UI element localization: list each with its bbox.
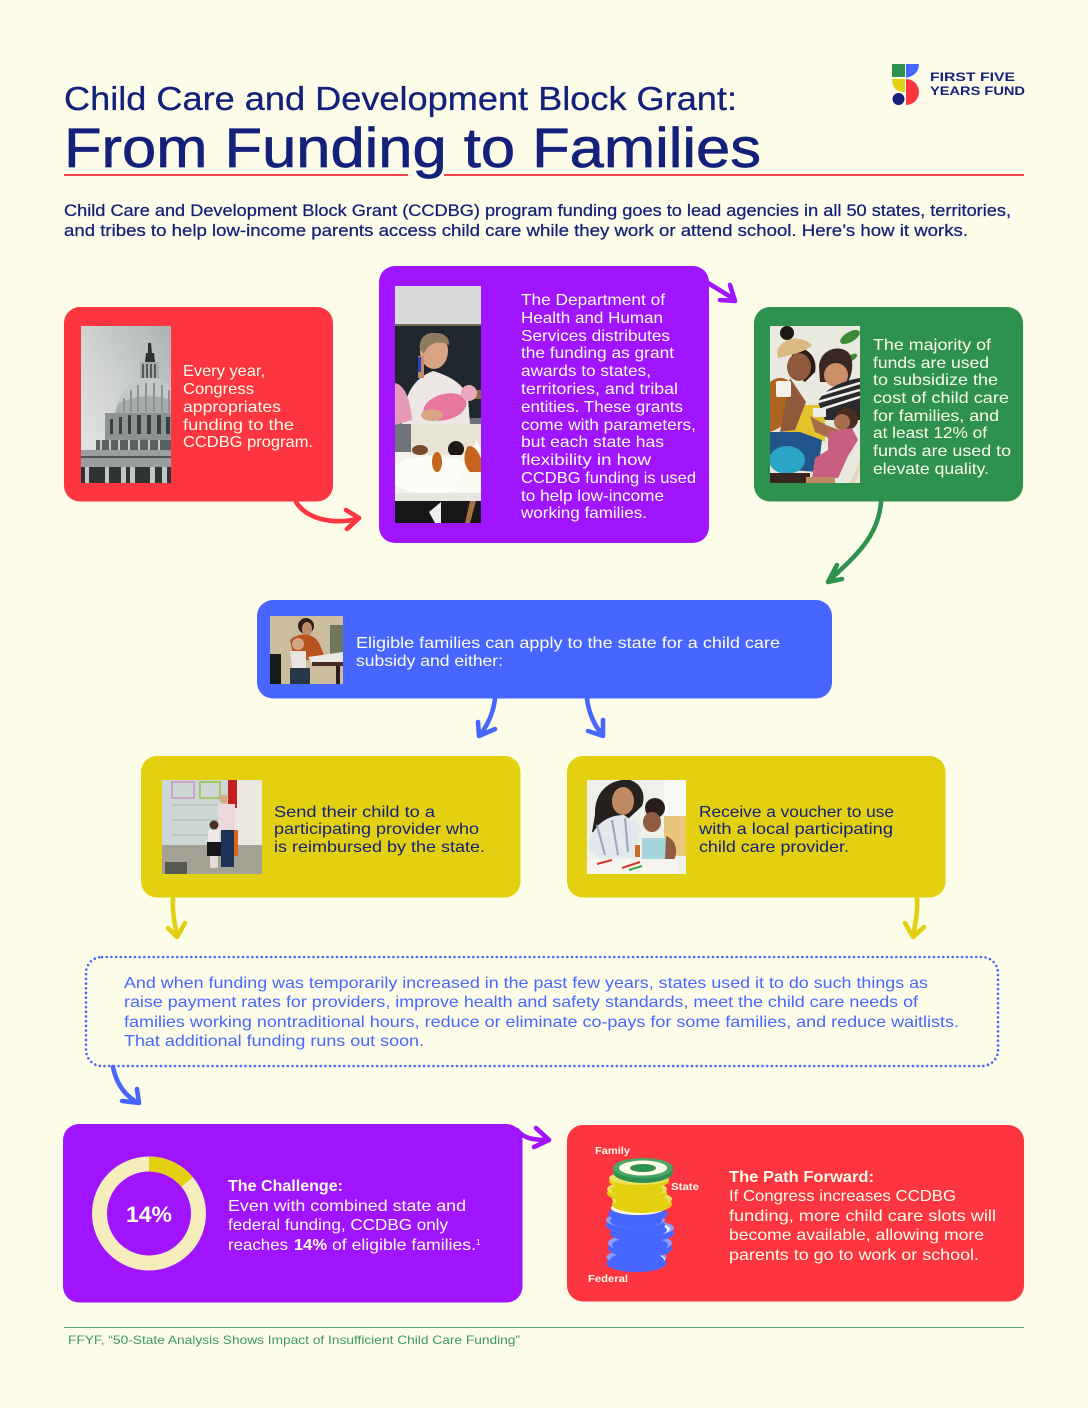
text: path forward: parents to go to work or school. [729,1247,979,1264]
donut chart: 14% [100,1164,198,1263]
text: grants distribution: to help low-income [521,488,664,505]
text: challenge: federal funding, CCDBG only [228,1217,448,1234]
panel: subsidies [754,307,1023,502]
icon: stack of coins with labels: Federal [588,1273,628,1285]
arrow: blue to right yellow [587,699,603,736]
text: send child: Send their child to a [274,804,435,821]
text: Congress appropriates: appropriates [183,399,281,416]
text: majority of funds: for families, and [873,408,999,425]
logo: First Five Years Fund: YEARS FUND [930,84,1025,98]
arrow: right yellow to note [905,898,924,937]
text: grants distribution: The Department of [521,292,666,309]
text: voucher [698,804,894,856]
icon: stack of coins with labels: Family [595,1145,630,1157]
text: majority of funds: elevate quality. [873,461,989,478]
text: majority of funds: cost of child care [873,390,1009,407]
text: grants distribution: awards to states, [521,363,651,380]
text: Congress appropriates [183,363,313,451]
callout: temporary funding note: families working nontraditional hours, reduce or eliminate co-pays for some families, and reduce waitlists. [124,1014,959,1031]
donut chart: 14%: 14% [126,1202,172,1227]
text: path forward: funding, more child care slots will [729,1208,996,1225]
callout: temporary funding note: raise payment rates for providers, improve health and safety standards, meet the child care needs of [124,994,919,1011]
text: grants distribution: the funding as grant [521,345,675,362]
text: majority of funds: to subsidize the [873,372,998,389]
arrow: green to blue [828,502,881,582]
icon: stack of coins with labels: State [671,1181,699,1193]
arrow: red to purple [296,502,359,529]
text: majority of funds [873,337,1011,478]
text: voucher: with a local participating [698,821,893,838]
panel: send child to provider [141,756,520,898]
text: majority of funds: funds are used [873,355,989,372]
text: grants distribution: working families. [520,505,647,522]
panel: the challenge [63,1124,522,1302]
panel: Health and Human Services [379,266,709,543]
footnote: FFYF, “50-State Analysis Shows Impact of Insufficient Child Care Funding” [68,1333,520,1347]
text: eligible families apply [356,635,780,670]
panel: voucher [567,756,946,898]
text: send child [274,804,485,856]
photo: adult and child walking in hallway [162,780,262,874]
text: grants distribution: territories, and tribal [521,381,678,398]
icon: stack of coins with labels [588,1145,699,1285]
text: path forward: The Path Forward: [729,1169,874,1186]
text: grants distribution: CCDBG funding is used [521,470,696,487]
text: challenge: Even with combined state and [228,1198,466,1215]
photo: US Capitol [81,326,171,483]
logo: First Five Years Fund: FIRST FIVE [930,70,1015,84]
text: majority of funds: The majority of [873,337,992,354]
text: challenge: reaches [228,1237,288,1254]
photo: two women feeding a baby [770,326,860,483]
text: voucher: Receive a voucher to use [699,804,894,821]
text: grants distribution: come with parameters, [521,417,696,434]
text: send child: participating provider who [274,821,479,838]
text: Congress appropriates: funding to the [183,417,294,434]
panel: eligible families [257,600,832,698]
intro text [64,202,1011,240]
text: grants distribution: Services distributes [521,328,670,345]
text: grants distribution: flexibility in how [521,452,652,469]
intro text: Child Care and Development Block Grant (CCDBG) program funding goes to lead agencies in all 50 states, territories, [64,202,1011,220]
photo: woman and child drawing [587,780,686,874]
text: Congress appropriates: Every year, [183,363,265,380]
arrow: blue to left yellow [478,699,495,736]
panel: the path forward [567,1125,1024,1302]
logo: First Five Years Fund [892,64,1025,105]
text: majority of funds: at least 12% of [873,425,988,442]
callout: temporary funding note: And when funding was temporarily increased in the past few years, states used it to do such things as [124,975,928,992]
text: send child: is reimbursed by the state. [274,839,485,856]
intro text: and tribes to help low-income parents access child care while they work or attend school. Here’s how it works. [64,222,968,240]
photo: man on phone holding baby, cat on table [395,286,481,523]
title: From Funding to Families [64,116,761,179]
panel: Congress [64,307,333,502]
callout: temporary funding note: That additional funding runs out soon. [124,1033,424,1050]
text: challenge: 1 [476,1238,481,1247]
arrow: challenge to path forward [517,1128,549,1147]
text: grants distribution: entities. These grants [521,399,683,416]
text: challenge: 14% [294,1237,327,1254]
photo: mother on phone with child [270,616,343,684]
arrow: purple to green [708,283,735,301]
text: challenge [228,1178,481,1254]
arrow: note to challenge [113,1067,139,1103]
text: path forward [729,1169,996,1264]
text: grants distribution: Health and Human [521,310,663,327]
text: path forward: If Congress increases CCDBG [729,1188,956,1205]
text: challenge: The Challenge: [228,1178,343,1195]
title: Child Care and Development Block Grant: [64,80,737,117]
text: voucher: child care provider. [699,839,849,856]
text: Congress appropriates: CCDBG program. [183,434,313,451]
callout: temporary funding note [86,957,998,1066]
text: path forward: become available, allowing more [729,1227,984,1244]
arrow: left yellow to note [168,898,185,937]
text: Congress appropriates: Congress [183,381,254,398]
text: majority of funds: funds are used to [873,443,1011,460]
title [64,80,761,179]
text: challenge: of eligible families. [332,1237,476,1254]
text: eligible families apply: subsidy and either: [356,653,503,670]
text: grants distribution: but each state has [521,434,664,451]
text: grants distribution [520,292,696,522]
text: eligible families apply: Eligible families can apply to the state for a child care [356,635,780,652]
